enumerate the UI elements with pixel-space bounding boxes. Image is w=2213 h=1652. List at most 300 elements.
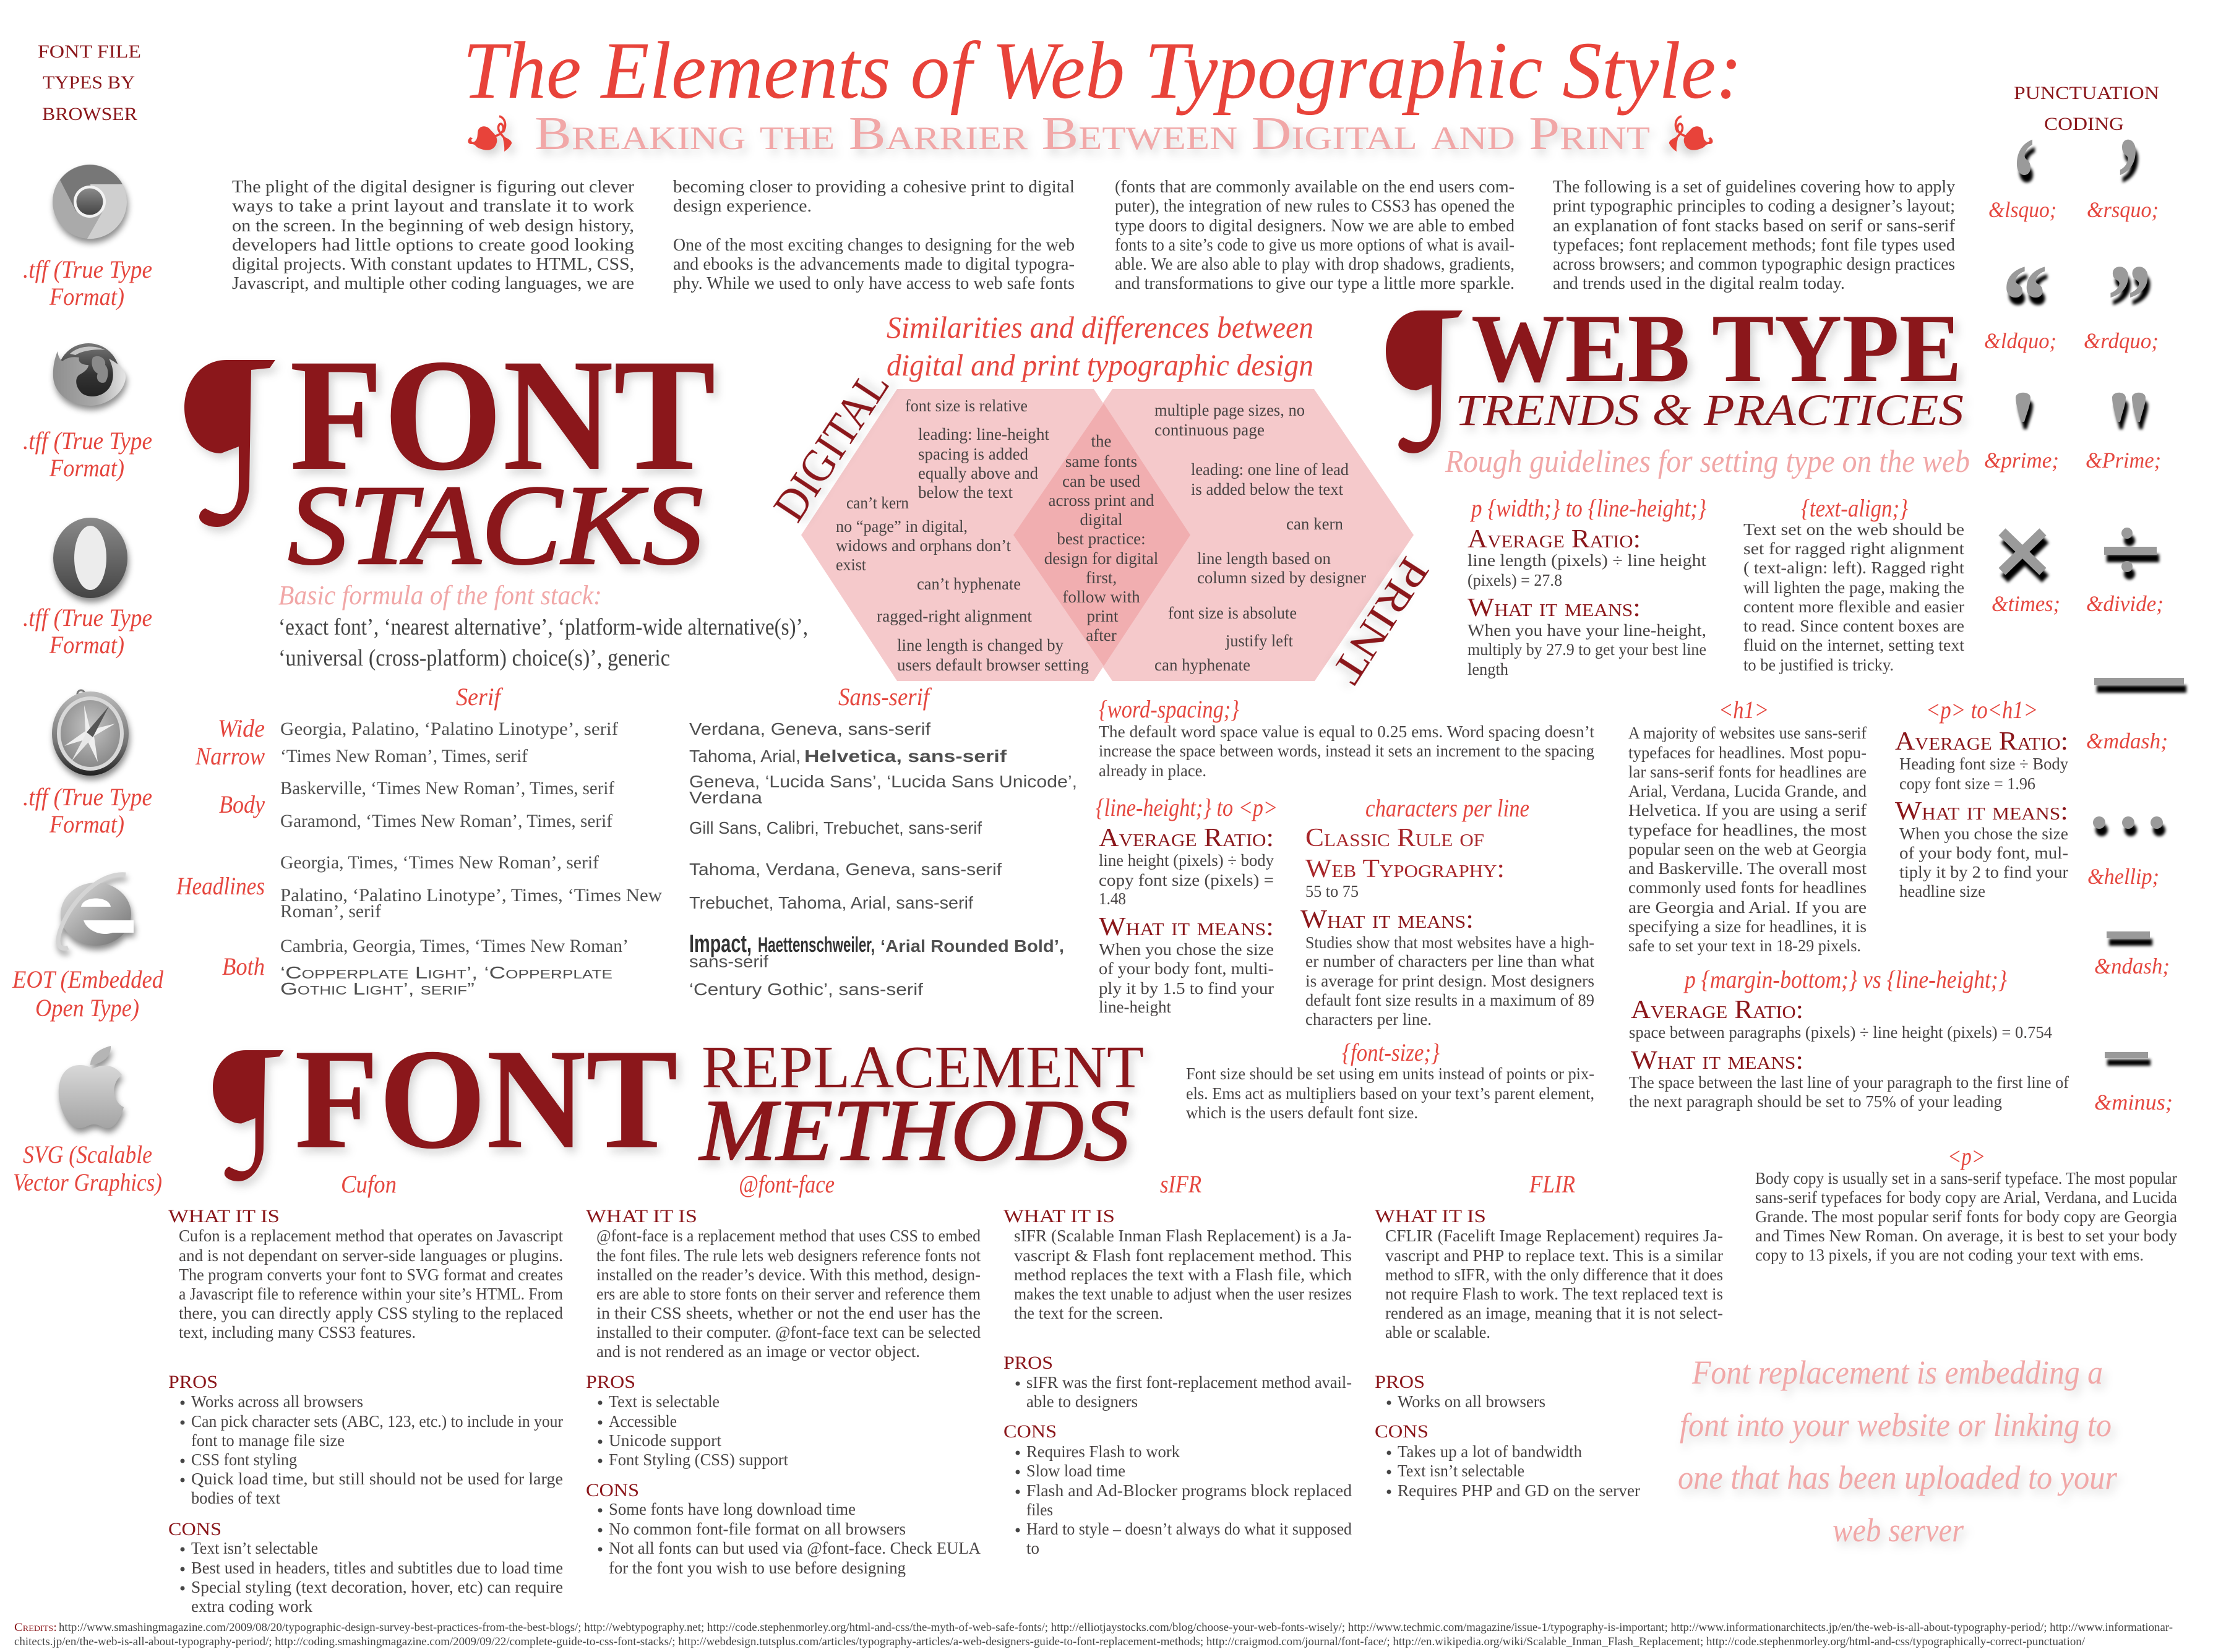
text: basic formula (278, 580, 808, 671)
intro column 1: ways to take a print layout and translate it to work (232, 197, 634, 216)
panel: punctuation coding (1984, 83, 2184, 1115)
sans-serif stacks: ‘Century Gothic’, sans-serif (689, 980, 923, 999)
digital-only text: widows and orphans don’t (836, 536, 1011, 555)
sans-serif stacks: Verdana (689, 788, 762, 807)
label: print: PRINT (1323, 549, 1438, 692)
column: font-face: @font-face (739, 1170, 835, 1198)
heading: web type: TRENDS & PRACTICES (1455, 385, 1964, 435)
print-only text: font size is absolute (1168, 604, 1297, 622)
label: tff 3: .tff (True Type (23, 604, 152, 631)
icon: internet explorer (58, 875, 134, 948)
column: sIFR (1003, 1170, 1352, 1557)
block: p to h1: What it means: (1895, 797, 2068, 826)
block: h1: popular seen on the web at Georgia (1628, 840, 1867, 858)
digital-only text: below the text (918, 483, 1013, 502)
column: sIFR: vascript & Flash font replacement method. This (1014, 1246, 1352, 1265)
column: sIFR: to (1026, 1539, 1039, 1557)
overlap text (1044, 432, 1158, 644)
label: tff 4: .tff (True Type (23, 783, 152, 811)
block: line-height to p: When you chose the size (1099, 940, 1274, 959)
serif stacks: Cambria, Georgia, Times, ‘Times New Roman’ (280, 936, 629, 956)
intro column 3: (fonts that are commonly available on the end users com- (1115, 178, 1515, 197)
column: Cufon: Cufon is a replacement method that operates on Javascript (179, 1226, 563, 1245)
serif stacks: Roman’, serif (280, 901, 381, 922)
column: FLIR: FLIR (1529, 1170, 1575, 1198)
heading: font stacks: STACKS (288, 462, 703, 589)
column: Cufon: Quick load time, but still should not be used for large (191, 1470, 563, 1488)
block: line-height to p: 1.48 (1099, 889, 1126, 908)
sans-serif stacks: Geneva, ‘Lucida Sans’, ‘Lucida Sans Unicode’, (689, 772, 1077, 791)
block: characters per line: characters per line. (1305, 1010, 1432, 1029)
em dash (2086, 678, 2184, 753)
glyph: times (2002, 532, 2043, 571)
block: h1: lar sans-serif fonts for headlines are (1628, 763, 1867, 781)
block: characters per line: Web Typography: (1305, 855, 1505, 883)
column: font-face: WHAT IT IS (586, 1206, 697, 1226)
column: sIFR: sIFR was the first font-replacement method avail- (1026, 1373, 1352, 1392)
block: text-align: to be justified is tricky. (1743, 656, 1894, 674)
serif stacks (280, 719, 662, 998)
block: characters per line: er number of characters per line than what (1305, 952, 1594, 970)
overlap text: same fonts (1065, 452, 1137, 471)
column: font-face: Some fonts have long download time (609, 1500, 856, 1518)
block: h1: and Baskerville. The overall most (1628, 859, 1867, 878)
label: tff 1: .tff (True Type (23, 255, 152, 283)
label: tff 2: Format) (49, 454, 124, 482)
digital-only text: can’t kern (846, 494, 909, 512)
venn: print shape (1013, 389, 1414, 681)
label: tff 4: Format) (49, 810, 124, 838)
intro column 2: phy. While we used to only have access to web safe fonts (673, 274, 1075, 293)
block: text-align: ( text-align: left). Ragged right (1743, 559, 1965, 577)
panel: venn diagram digital vs print (764, 310, 1438, 692)
heading: web type: WEB TYPE (1471, 294, 1962, 403)
en dash: &ndash; (2094, 954, 2170, 978)
block: word-spacing: The default word space value is equal to 0.25 ems. Word spacing doesn’t (1099, 722, 1594, 741)
table headings: Sans-serif (838, 683, 932, 711)
column: Cufon: CONS (168, 1519, 221, 1539)
column: FLIR: Text isn’t selectable (1398, 1462, 1524, 1480)
block: margin-bottom vs line-height: What it means: (1631, 1046, 1803, 1075)
glyph: double prime (2112, 393, 2146, 422)
glyph: divide (2104, 528, 2157, 572)
sans-serif stacks: Verdana, Geneva, sans-serif (689, 719, 930, 738)
digital-only text (836, 396, 1089, 674)
heading: font file types: BROWSER (42, 104, 137, 124)
heading: punctuation coding (2014, 83, 2159, 134)
column: sIFR: Requires Flash to work (1026, 1442, 1180, 1461)
heading: web type (1386, 294, 1964, 453)
column: FLIR: not require Flash to work. The text replaced text is (1385, 1285, 1723, 1303)
venn heading: digital and print typographic design (887, 348, 1313, 382)
callout: pull quote (1678, 1354, 2118, 1549)
serif stacks: Palatino, ‘Palatino Linotype’, Times, ‘Times New (280, 885, 662, 905)
column: Cufon: Best used in headers, titles and subtitles due to load time (191, 1559, 563, 1577)
block: h1 (1628, 696, 1867, 955)
print-only text: continuous page (1154, 421, 1265, 439)
block: h1: typeface for headlines, the most (1628, 821, 1867, 839)
column: sIFR: sIFR (1160, 1170, 1201, 1198)
column: font-face: Not all fonts can but used via @font-face. Check EULA (609, 1539, 981, 1557)
venn: digital shape (801, 389, 1190, 681)
double quotes: &ldquo; (1984, 328, 2056, 353)
label: tff 1 (23, 255, 152, 310)
single quotes: &lsquo; (1988, 197, 2056, 222)
panel: font replacement methods (168, 1019, 1723, 1616)
block: p body copy: sans-serif typefaces for body copy are Arial, Verdana, and Lucida (1755, 1188, 2177, 1207)
icon: firefox (53, 343, 126, 406)
intro column 1: Javascript, and multiple other coding languages, we are (232, 274, 634, 293)
block: word-spacing (1099, 695, 1594, 780)
subtitle: Breaking the Barrier Between Digital and Print (535, 108, 1650, 160)
block: line-height to p: line-height (1099, 998, 1171, 1016)
intro column 3 (1115, 178, 1515, 293)
sans-serif stacks: Trebuchet, Tahoma, Arial, sans-serif (689, 893, 973, 912)
block: p to h1: tiply it by 2 to find your (1899, 863, 2068, 881)
block: h1: commonly used fonts for headlines (1628, 878, 1867, 897)
minus (2094, 1052, 2173, 1115)
block: line-height to p: What it means: (1099, 913, 1274, 941)
heading: font replacement methods: FONT (294, 1019, 678, 1179)
block: h1: A majority of websites use sans-serif (1628, 724, 1867, 742)
double quotes (1984, 244, 2159, 357)
intro column 1: developers had little options to create good looking (232, 236, 634, 255)
heading: font file types (38, 41, 141, 124)
column: Cufon: a Javascript file to reference within your site’s HTML. From (179, 1285, 563, 1303)
intro column 1 (232, 178, 635, 293)
row labels: Narrow (195, 742, 265, 770)
row labels: Headlines (176, 872, 265, 900)
sans-serif stacks: Gill Sans, Calibri, Trebuchet, sans-serif (689, 818, 982, 837)
block: p to h1: Average Ratio: (1895, 727, 2068, 756)
block: p to h1: When you chose the size (1899, 824, 2068, 843)
block: width to line-height: What it means: (1467, 594, 1641, 622)
intro column 2 (673, 178, 1075, 293)
column: FLIR: method to sIFR, with the only difference that it does (1385, 1265, 1723, 1284)
column: font-face: Text is selectable (609, 1392, 720, 1411)
heading: font stacks (184, 326, 716, 589)
column: Cufon: Cufon (341, 1170, 397, 1198)
digital-only text: can’t hyphenate (917, 575, 1021, 593)
column: Cufon: Works across all browsers (191, 1392, 363, 1411)
block: font-size: {font-size;} (1342, 1038, 1440, 1066)
column: font-face: the font files. The rule lets web designers reference fonts not (596, 1246, 981, 1265)
overlap text: print (1086, 607, 1119, 625)
block: characters per line (1300, 794, 1594, 1029)
heading: punctuation coding: CODING (2044, 114, 2124, 134)
callout: pull quote: Font replacement is embedding a (1691, 1354, 2103, 1391)
intro column 3: and transformations to give our type a little more sparkle. (1115, 274, 1515, 293)
block: text-align: set for ragged right alignment (1743, 539, 1965, 558)
column: FLIR: able or scalable. (1385, 1323, 1490, 1342)
column: FLIR: rendered as an image, meaning that it is not select- (1385, 1304, 1723, 1322)
column: font-face: CONS (586, 1480, 639, 1500)
callout: pull quote: font into your website or linking to (1680, 1406, 2112, 1444)
serif stacks: Garamond, ‘Times New Roman’, Times, serif (280, 811, 612, 831)
serif stacks: Georgia, Palatino, ‘Palatino Linotype’, serif (280, 719, 618, 739)
digital-only text: no “page” in digital, (836, 517, 968, 536)
sans-serif stacks: Helvetica, sans-serif (804, 747, 1007, 766)
panel: font stacks (176, 326, 1077, 999)
heading: font replacement methods: METHODS (698, 1081, 1130, 1179)
column: Cufon: and is not dependant on server-side languages or plugins. (179, 1246, 563, 1265)
print-only text: column sized by designer (1197, 568, 1366, 587)
label: tff 4 (23, 783, 152, 838)
column: font-face (586, 1170, 981, 1577)
block: font-size: Font size should be set using em units instead of points or pix- (1186, 1064, 1594, 1083)
column: sIFR: makes the text unable to adjust when the user resizes (1014, 1285, 1352, 1303)
column: font-face: ers are able to store fonts on their server and reference them (596, 1285, 981, 1303)
block: text-align (1743, 494, 1965, 674)
block: margin-bottom vs line-height (1629, 965, 2069, 1111)
block: characters per line: is average for print design. Most designers (1305, 972, 1594, 990)
block: p to h1: of your body font, mul- (1899, 844, 2068, 862)
block: width to line-height: multiply by 27.9 to get your best line (1467, 640, 1706, 659)
block: h1: typefaces for headlines. Most popu- (1628, 743, 1867, 762)
column: FLIR: Takes up a lot of bandwidth (1398, 1442, 1582, 1461)
heading: punctuation coding: PUNCTUATION (2014, 83, 2159, 103)
block: characters per line: 55 to 75 (1305, 882, 1359, 901)
digital-only text: spacing is added (918, 445, 1028, 463)
row labels: Body (219, 790, 265, 818)
block: font-size (1186, 1038, 1594, 1122)
heading: font stacks: FONT (290, 326, 716, 504)
callout: pull quote: web server (1833, 1512, 1964, 1549)
column: Cufon: Special styling (text decoration, hover, etc) can require (191, 1578, 563, 1596)
block: margin-bottom vs line-height: the next paragraph should be set to 75% of your leading (1629, 1092, 2002, 1111)
math signs: &divide; (2086, 591, 2164, 616)
block: h1: safe to set your text in 18-29 pixels. (1628, 936, 1861, 955)
row labels: Both (222, 952, 265, 980)
panel: font file types by browser (12, 41, 164, 1196)
label: EOT: Open Type) (35, 994, 139, 1022)
column: font-face: and is not rendered as an image or vector object. (596, 1342, 920, 1361)
label: EOT: EOT (Embedded (12, 965, 164, 993)
column: Cufon: text, including many CSS3 features. (179, 1323, 416, 1342)
credits: chitects.jp/en/the-web-is-all-about-typography-period/; http://coding.smashingmagazine.com/2009/09/22/complete-guide-to-css-font-stacks/; http://webdesign.tutsplus.com/articles/typography-articles/a-web-designers-guide-to-font-replacement-methods; http://craigmod.com/journal/font-face/; http://en.wikipedia.org/wiki/Scalable_Inman_Flash_Replacement; http://code.stephenmorley.org/html-and-css/typographically-correct-punctuation/ (14, 1635, 2086, 1648)
block: text-align: to read. Since content boxes are (1743, 617, 1964, 635)
block: characters per line: characters per line (1365, 794, 1529, 822)
block: word-spacing: {word-spacing;} (1099, 695, 1239, 723)
intro column 4: across browsers; and common typographic design practices (1553, 255, 1955, 274)
block: p body copy: Grande. The most popular serif fonts for body copy are Georgia (1755, 1207, 2177, 1226)
row labels (176, 714, 265, 980)
block: characters per line: Classic Rule of (1305, 824, 1484, 852)
intro column 2: becoming closer to providing a cohesive print to digital (673, 178, 1075, 197)
minus: &minus; (2094, 1090, 2173, 1115)
intro column 1: on the screen. In the beginning of web design history, (232, 216, 634, 236)
row labels: Wide (218, 714, 265, 742)
table headings (456, 683, 932, 711)
intro column 4: and trends used in the digital realm today. (1553, 274, 1845, 293)
block: p body copy (1755, 1142, 2177, 1264)
block: font-size: which is the users default font size. (1186, 1103, 1418, 1122)
column: Cufon: font to manage file size (191, 1431, 345, 1450)
block: text-align: will lighten the page, making the (1743, 578, 1964, 597)
sans-serif stacks (689, 719, 1077, 999)
em dash: &mdash; (2086, 729, 2168, 753)
overlap text: design for digital (1044, 549, 1158, 568)
block: characters per line: Studies show that most websites have a high- (1305, 933, 1594, 952)
label: SVG: Vector Graphics) (13, 1168, 162, 1196)
block: width to line-height: p {width;} to {line-height;} (1469, 494, 1706, 522)
block: characters per line: default font size results in a maximum of 89 (1305, 991, 1594, 1009)
label: SVG (13, 1141, 162, 1196)
column: sIFR: Hard to style – doesn’t always do what it supposed (1026, 1520, 1352, 1538)
intro column 1: digital projects. With constant updates to HTML, CSS, (232, 255, 634, 274)
heading: font replacement methods: REPLACEMENT (702, 1034, 1144, 1100)
column: sIFR: WHAT IT IS (1003, 1206, 1115, 1226)
overlap text: across print and (1049, 491, 1154, 510)
block: p to h1: Heading font size ÷ Body (1899, 755, 2068, 773)
credits: http://www.smashingmagazine.com/2009/08/20/typographic-design-survey-best-practices-from-the-best-blogs/; http://webtypography.net; http://code.stephenmorley.org/html-and-css/the-myth-of-web-safe-fonts/; http://elliotjaystocks.com/blog/choose-your-web-fonts-wisely/; http://www.techmic.com/magazine/issue-1/typography-is-important; http://www.informationarchitects.jp/en/the-web-is-all-about-typography-period/; http://www.informationar- (59, 1621, 2173, 1634)
column: font-face: Font Styling (CSS) support (609, 1450, 788, 1469)
column: Cufon: CSS font styling (191, 1450, 297, 1469)
block: p to h1: headline size (1899, 882, 1985, 901)
block: p body copy: <p> (1948, 1142, 1985, 1170)
single quotes (1988, 114, 2159, 244)
column: sIFR: the text for the screen. (1014, 1304, 1163, 1322)
print-only text (1154, 401, 1366, 674)
block: text-align: content more flexible and easier (1743, 597, 1964, 616)
block: text-align: {text-align;} (1801, 494, 1908, 522)
venn: overlap (1013, 403, 1190, 666)
intro column 3: type doors to digital designers. Now we are able to embed (1115, 216, 1515, 236)
intro column 2: and ebooks is the advancements made to digital typogra- (673, 255, 1075, 274)
serif stacks: ‘Copperplate Light’, ‘Copperplate (280, 963, 612, 982)
column: Cufon: PROS (168, 1372, 218, 1392)
column: Cufon (168, 1170, 563, 1616)
label: EOT (12, 965, 164, 1022)
block: p body copy: and Times New Roman. On average, it is best to set your body (1755, 1226, 2177, 1245)
digital-only text: line length is changed by (897, 636, 1064, 654)
column: font-face: PROS (586, 1372, 635, 1392)
icon: safari (52, 690, 129, 776)
block: width to line-height (1467, 494, 1707, 678)
block: h1: specifying a size for headlines, it is (1628, 917, 1867, 936)
block: margin-bottom vs line-height: Average Ratio: (1631, 996, 1803, 1024)
block: line-height to p: Average Ratio: (1099, 824, 1274, 852)
panel: intro text (232, 178, 1956, 293)
overlap text: follow with (1062, 588, 1140, 606)
primes: &prime; (1984, 448, 2059, 473)
icon: opera (53, 518, 127, 598)
intro column 2: design experience. (673, 197, 812, 216)
column: Cufon: Text isn’t selectable (191, 1539, 318, 1557)
print-only text: justify left (1225, 631, 1293, 650)
column: font-face: No common font-file format on all browsers (609, 1520, 906, 1538)
column: font-face: Accessible (609, 1412, 677, 1431)
double quotes: &rdquo; (2084, 328, 2159, 353)
block: h1: Arial, Verdana, Lucida Grande, and (1628, 782, 1867, 800)
serif stacks: Baskerville, ‘Times New Roman’, Times, serif (280, 778, 614, 798)
block: width to line-height: length (1467, 660, 1508, 678)
overlap text: the (1091, 432, 1112, 450)
column: sIFR: PROS (1003, 1353, 1053, 1373)
column: Cufon: The program converts your font to SVG format and creates (179, 1265, 563, 1284)
overlap text: first, (1086, 568, 1117, 587)
print-only text: line length based on (1197, 549, 1331, 568)
print-only text: can hyphenate (1154, 656, 1250, 674)
text: basic formula: ‘exact font’, ‘nearest alternative’, ‘platform-wide alternative(s)’, (278, 614, 808, 640)
digital-only text: font size is relative (905, 396, 1028, 415)
block: margin-bottom vs line-height: p {margin-bottom;} vs {line-height;} (1683, 965, 2007, 993)
title: The Elements of Web Typographic Style: (463, 25, 1742, 116)
sans-serif stacks: ‘Arial Rounded Bold’, (880, 936, 1064, 956)
digital-only text: exist (836, 555, 866, 574)
icon: right heart ornament (1669, 116, 1713, 152)
icon: apple (59, 1046, 124, 1128)
block: p to h1: <p> to<h1> (1926, 696, 2038, 724)
ellipsis: &hellip; (2087, 864, 2159, 889)
column: FLIR: PROS (1375, 1372, 1425, 1392)
intro column 3: puter), the integration of new rules to CSS3 has opened the (1115, 197, 1515, 216)
math signs (1992, 528, 2164, 616)
column: sIFR: files (1026, 1500, 1053, 1519)
block: margin-bottom vs line-height: The space between the last line of your paragraph to the first line of (1629, 1073, 2069, 1092)
digital-only text: equally above and (918, 464, 1038, 482)
block: p body copy: copy to 13 pixels, if you are not coding your text with ems. (1755, 1246, 2144, 1264)
column: sIFR: sIFR (Scalable Inman Flash Replacement) is a Ja- (1014, 1226, 1352, 1245)
column: font-face: @font-face is a replacement method that uses CSS to embed (596, 1226, 981, 1245)
intro column 4: print typographic principles to coding a designer’s layout; (1553, 197, 1955, 216)
glyph: left single quote: ‘ (2011, 114, 2037, 244)
table headings: Serif (456, 683, 504, 711)
column: Cufon: extra coding work (191, 1597, 312, 1616)
digital-only text: ragged-right alignment (877, 607, 1033, 625)
block: line-height to p: {line-height;} to <p> (1096, 794, 1278, 821)
print-only text: is added below the text (1191, 480, 1343, 499)
icon: chrome (53, 165, 127, 239)
column: font-face: Unicode support (609, 1431, 722, 1450)
intro column 4 (1553, 178, 1956, 293)
label: tff 3 (23, 604, 152, 659)
label: digital: DIGITAL (764, 361, 900, 530)
digital-only text: users default browser setting (897, 656, 1089, 674)
block: width to line-height: When you have your line-height, (1467, 621, 1706, 640)
column: Cufon: Can pick character sets (ABC, 123, etc.) to include in your (191, 1412, 563, 1431)
overlap text: after (1086, 626, 1117, 644)
en dash (2094, 931, 2170, 978)
block: margin-bottom vs line-height: space between paragraphs (pixels) ÷ line height (pixels) = 0.754 (1629, 1023, 2052, 1042)
block: width to line-height: Average Ratio: (1467, 525, 1641, 554)
intro column 4: an explanation of font stacks based on serif or sans-serif (1553, 216, 1956, 236)
digital-only text: leading: line-height (918, 425, 1050, 443)
intro column 1: The plight of the digital designer is figuring out clever (232, 178, 635, 197)
sans-serif stacks: Impact, (689, 930, 752, 957)
primes: &Prime; (2086, 448, 2161, 473)
column: FLIR: Works on all browsers (1398, 1392, 1545, 1411)
text: basic formula: ‘universal (cross-platform) choice(s)’, generic (278, 645, 670, 671)
block: width to line-height: line length (pixels) ÷ line height (1467, 551, 1707, 570)
block: text-align: Text set on the web should be (1743, 520, 1964, 539)
serif stacks: Gothic Light’, serif” (280, 979, 475, 998)
column: sIFR: method replaces the text with a Flash file, which (1014, 1265, 1352, 1284)
intro column 3: fonts to a site’s code to give us more options of what is avail- (1115, 236, 1515, 255)
label: tff 3: Format) (49, 631, 124, 659)
block: line-height to p: ply it by 1.5 to find your (1099, 979, 1274, 998)
column: font-face: for the font you wish to use before designing (609, 1559, 906, 1577)
column: font-face: in their CSS sheets, whether or not the end user has the (596, 1304, 981, 1322)
column: Cufon: there, you can directly apply CSS styling to the replaced (179, 1304, 563, 1322)
column: sIFR: able to designers (1026, 1392, 1138, 1411)
block: line-height to p: copy font size (pixels) = (1099, 871, 1274, 889)
block: font-size: els. Ems act as multipliers based on your text’s parent element, (1186, 1084, 1594, 1103)
text: basic formula: Basic formula of the font stack: (278, 580, 602, 610)
label: SVG: SVG (Scalable (23, 1141, 152, 1168)
overlap text: can be used (1062, 472, 1140, 490)
heading: font file types: TYPES BY (43, 72, 135, 93)
